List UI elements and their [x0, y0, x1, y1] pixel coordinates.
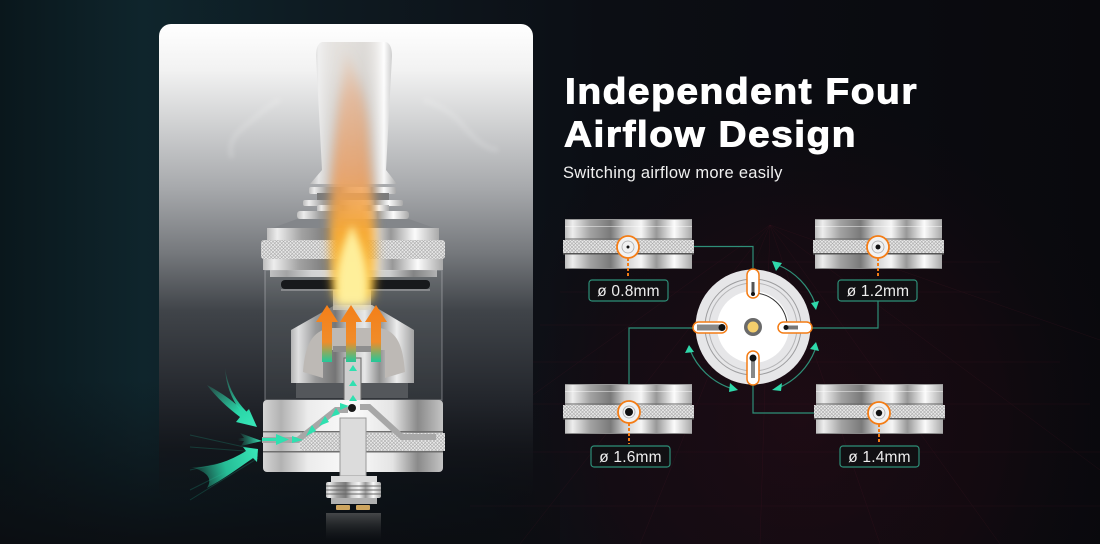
- label: 1.6mm: ø 1.6mm: [599, 449, 662, 466]
- airflow disc: [693, 269, 812, 385]
- label: 1.4mm: [840, 446, 919, 467]
- label: 1.6mm: [591, 446, 670, 467]
- green intake arrows: [190, 368, 262, 500]
- slot: right: [778, 322, 812, 333]
- orange arrows: [316, 305, 387, 362]
- slot: left: [693, 322, 727, 333]
- title: Airflow Design: [564, 114, 857, 154]
- label: 1.4mm: ø 1.4mm: [848, 449, 911, 466]
- ring: 1.4mm: [814, 384, 945, 444]
- label: 0.8mm: ø 0.8mm: [597, 283, 660, 300]
- drip tip: [310, 42, 397, 184]
- connector: [326, 476, 381, 540]
- ring: 1.6mm: [563, 384, 694, 444]
- title: [564, 70, 918, 154]
- slot: top: [747, 269, 759, 298]
- ring: 1.2mm: [813, 219, 944, 278]
- top cap: [261, 187, 445, 277]
- atomizer illustration: [190, 42, 445, 540]
- rotation arrows: [685, 261, 819, 392]
- green airflow path: [262, 365, 357, 445]
- label: 1.2mm: [838, 280, 917, 301]
- flame: [330, 50, 375, 305]
- glass tank: [265, 270, 442, 400]
- subtitle: Switching airflow more easily: [563, 164, 783, 182]
- connector lines: [629, 246, 878, 413]
- base: [262, 400, 445, 476]
- smoke wisps: [231, 100, 498, 158]
- ring: 0.8mm: [563, 219, 694, 278]
- slot: bottom: [747, 351, 759, 385]
- label: 0.8mm: [589, 280, 668, 301]
- title: Independent Four: [565, 70, 918, 112]
- panel: product card: [159, 24, 533, 502]
- label: 1.2mm: ø 1.2mm: [847, 283, 909, 300]
- inner chamber: [291, 290, 414, 416]
